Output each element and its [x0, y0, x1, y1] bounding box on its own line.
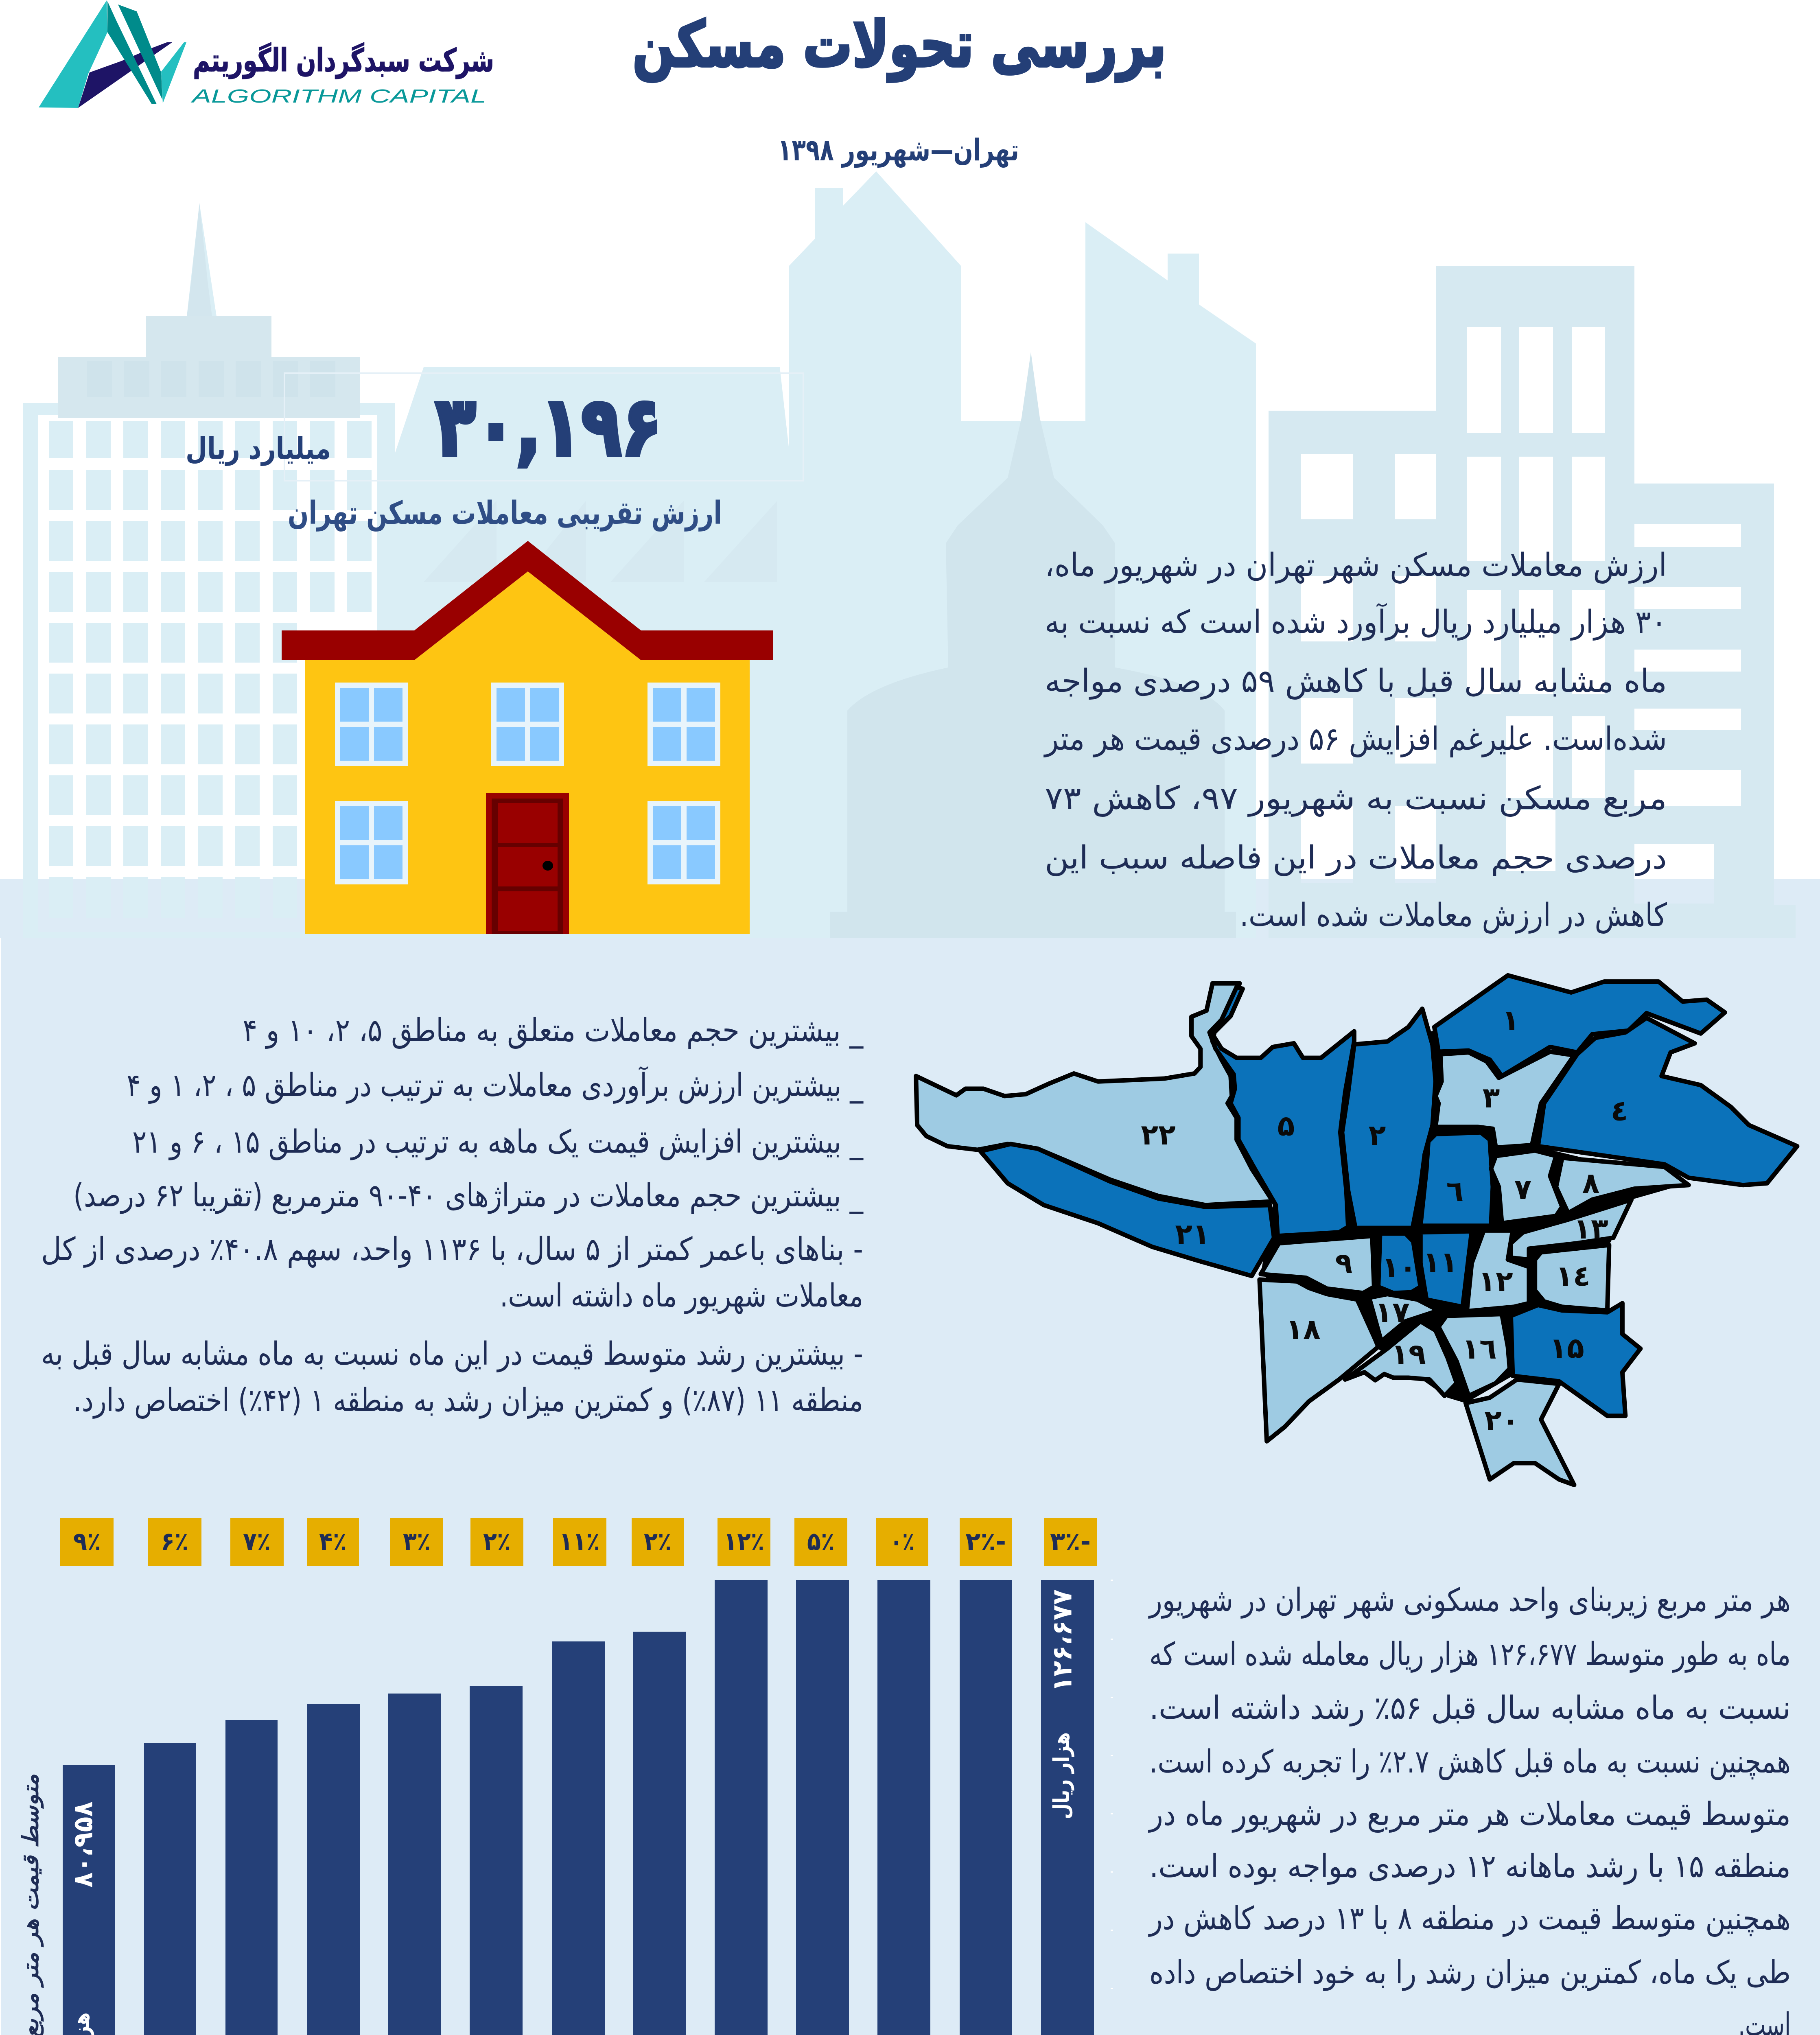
monthly change badges: ۲٪	[483, 1526, 511, 1556]
monthly change badges: ۷٪	[243, 1526, 271, 1556]
map: Tehran districts: ۱۱	[1423, 1245, 1458, 1279]
map: Tehran districts: ۱۸	[1286, 1313, 1321, 1346]
map: Tehran districts: ۲۰	[1484, 1404, 1519, 1437]
map: Tehran districts: ۲۲	[1141, 1118, 1176, 1151]
text block: intro paragraph: ۳۰ هزار میلیارد ریال برآورد شده است که نسبت به	[1045, 603, 1667, 641]
monthly change badges	[60, 1518, 1097, 1566]
text block: intro paragraph: کاهش در ارزش معاملات شده است.	[1240, 897, 1667, 934]
map: Tehran districts: ۳	[1483, 1081, 1500, 1114]
map: Tehran districts: ۱٤	[1555, 1259, 1590, 1293]
map: Tehran districts: ۱۳	[1573, 1212, 1608, 1245]
map: Tehran districts: ۲۱	[1175, 1217, 1210, 1251]
monthly change badges: ۲٪	[644, 1526, 672, 1556]
map: Tehran districts: ۱۰	[1382, 1251, 1417, 1284]
map: Tehran districts: ٦	[1446, 1175, 1463, 1208]
text block: key findings list: _ بیشترین حجم معاملات در متراژهای ۴۰-۹۰ مترمربع (تقریبا ۶۲ درصد)	[73, 1177, 864, 1214]
monthly change badges: ۲٪-	[965, 1526, 1006, 1556]
text block: key findings list: _ بیشترین ارزش برآوردی معاملات به ترتیب در مناطق ۵ ، ۲، ۱ و ۴	[127, 1066, 864, 1104]
text block: price commentary	[1148, 1582, 1791, 2035]
text block: key findings list: _ بیشترین افزایش قیمت یک ماهه به ترتیب در مناطق ۱۵ ، ۶ و ۲۱	[132, 1124, 864, 1161]
monthly change badges: ۳٪	[403, 1526, 431, 1556]
text block: key findings list	[41, 1012, 864, 1419]
stat: transaction value	[186, 380, 722, 532]
map: Tehran districts: ٤	[1611, 1094, 1628, 1127]
map: Tehran districts: ۱٦	[1462, 1332, 1497, 1365]
text block: key findings list: - بناهای باعمر کمتر از ۵ سال، با ۱۱۳۶ واحد، سهم ۴۰.۸٪ درصدی از کل	[41, 1231, 863, 1268]
text block: key findings list: منطقه ۱۱ (۸۷٪) و کمترین میزان رشد به منطقه ۱ (۴۲٪) اختصاص دارد.	[73, 1382, 863, 1419]
text block: price commentary: منطقه ۱۵ با رشد ماهانه ۱۲ درصدی مواجه بوده است.	[1149, 1848, 1791, 1885]
map: Tehran districts: ۷	[1514, 1173, 1531, 1206]
map: Tehran districts: ۱۲	[1478, 1265, 1513, 1298]
text block: intro paragraph: شده‌است. علیرغم افزایش ۵۶ درصدی قیمت هر متر	[1043, 721, 1667, 758]
map: Tehran districts: ۱۵	[1549, 1331, 1584, 1365]
map: Tehran districts: ۱۷	[1375, 1295, 1410, 1329]
map: Tehran districts	[916, 975, 1797, 1485]
text block: key findings list: _ بیشترین حجم معاملات متعلق به مناطق ۵، ۲، ۱۰ و ۴	[243, 1012, 864, 1049]
monthly change badges: ۵٪	[807, 1526, 835, 1556]
bar chart: average price per square metre	[18, 1518, 1113, 2035]
icon: house	[282, 541, 773, 934]
bars	[63, 1580, 1094, 2035]
monthly change badges: ۱۱٪	[559, 1526, 600, 1556]
logo: ALGORITHM CAPITAL	[190, 85, 486, 107]
text block: key findings list: معاملات شهریور ماه داشته است.	[500, 1278, 863, 1315]
monthly change badges: ۶٪	[161, 1526, 188, 1556]
first bar value: ۸۰،۹۵۸	[68, 1801, 98, 1888]
last bar value: هزار ریال	[1048, 1732, 1074, 1819]
text block: price commentary: نسبت به ماه مشابه سال قبل ۵۶٪ رشد داشته است.	[1149, 1690, 1791, 1726]
text block: key findings list: - بیشترین رشد متوسط قیمت در این ماه نسبت به ماه مشابه سال قبل به	[41, 1336, 863, 1373]
monthly change badges: ۹٪	[73, 1526, 101, 1556]
stat: transaction value: میلیارد ریال	[186, 431, 331, 466]
monthly change badges: ۰٪	[890, 1526, 914, 1556]
title: بررسی تحولات مسکن	[632, 7, 1166, 82]
last bar value: ۱۲۶،۶۷۷	[1047, 1589, 1078, 1692]
skyline background	[0, 171, 1796, 938]
last bar value	[1047, 1589, 1078, 1819]
text block: intro paragraph: ماه مشابه سال قبل با کاهش ۵۹ درصدی مواجه	[1045, 663, 1667, 700]
text block: intro paragraph: مربع مسکن نسبت به شهریور ۹۷، کاهش ۷۳	[1045, 780, 1667, 817]
text block: intro paragraph: ارزش معاملات مسکن شهر تهران در شهریور ماه،	[1045, 547, 1667, 584]
stat: transaction value: ۳۰,۱۹۶	[435, 380, 662, 475]
monthly change badges: ۴٪	[319, 1526, 347, 1556]
text block: intro paragraph	[1043, 547, 1667, 934]
monthly change badges: ۳٪-	[1050, 1526, 1091, 1556]
map: Tehran districts: ۹	[1335, 1247, 1352, 1280]
map: Tehran districts: ۵	[1278, 1109, 1295, 1142]
stat: transaction value: ارزش تقریبی معاملات مسکن تهران	[288, 495, 722, 532]
map: Tehran districts: ۱	[1502, 1004, 1519, 1037]
map: Tehran districts: ۱۹	[1391, 1337, 1426, 1371]
map: Tehran districts: ۸	[1582, 1166, 1599, 1200]
logo: شرکت سبدگردان الگوریتم	[193, 42, 494, 79]
map: Tehran districts: ۲	[1369, 1118, 1386, 1152]
y axis title: متوسط قیمت هر متر مربع	[18, 1774, 44, 2035]
monthly change badges: ۱۲٪	[724, 1526, 764, 1556]
first bar value	[68, 1801, 98, 2035]
subtitle: تهران—شهریور ۱۳۹۸	[778, 133, 1019, 168]
logo	[39, 0, 494, 108]
text block: intro paragraph: درصدی حجم معاملات در این فاصله سبب این	[1045, 840, 1667, 877]
